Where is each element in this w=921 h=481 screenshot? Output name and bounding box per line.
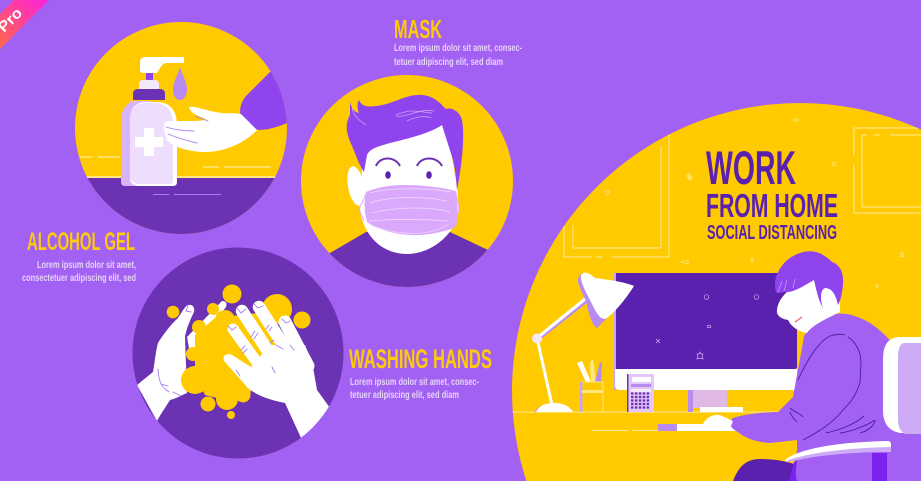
face: [360, 112, 459, 254]
chair arm rest: [785, 441, 891, 462]
hair: [347, 95, 463, 190]
hand on keyboard: [703, 415, 733, 426]
keyboard: [658, 424, 737, 431]
text block: washing hands: tetuer adipiscing elit, sed diam: [350, 390, 459, 401]
heading: work from home: [706, 151, 838, 239]
text block: alcohol gel: Lorem ipsum dolor sit amet,: [37, 260, 136, 271]
panel: mask circle: [300, 75, 520, 300]
icon: drop: [173, 67, 187, 100]
icon: face mask: [359, 185, 459, 235]
panel: washing hands circle: [132, 247, 344, 459]
chair post: [872, 453, 887, 481]
icon: hand receiving gel: [164, 70, 290, 152]
wall frames: [564, 128, 921, 258]
mouth: [795, 317, 802, 322]
eyes and eyebrows: [376, 158, 442, 179]
desk lamp: [532, 273, 634, 412]
person: [703, 251, 921, 481]
panel: alcohol gel circle: [75, 22, 290, 237]
text block: alcohol gel: ALCOHOL GEL: [27, 228, 135, 256]
heading: work from home: SOCIAL DISTANCING: [707, 222, 837, 244]
desk line: [512, 412, 787, 413]
heading: work from home: FROM HOME: [706, 187, 838, 224]
shoulders: [330, 232, 488, 287]
right hand: [224, 304, 330, 440]
text block: alcohol gel: consectetuer adipiscing elit, sed: [22, 273, 136, 284]
panel: work from home circle: [500, 100, 921, 481]
text block: mask: [394, 14, 522, 68]
hair: [775, 251, 843, 308]
text block: washing hands: Lorem ipsum dolor sit amet, consec-: [350, 377, 479, 388]
icon: sanitizer bottle: [121, 57, 184, 186]
ear: [347, 166, 362, 206]
head: [777, 275, 840, 333]
Pro ribbon: [0, 0, 49, 49]
text block: alcohol gel: [22, 228, 136, 284]
heading: work from home: WORK: [706, 141, 796, 194]
text block: washing hands: WASHING HANDS: [349, 344, 492, 374]
legs: [733, 459, 800, 481]
torso and arm: [730, 314, 921, 481]
wall sparkles: [605, 118, 904, 288]
text block: mask: MASK: [394, 14, 442, 44]
soap foam: [167, 284, 310, 419]
text block: washing hands: [349, 344, 492, 401]
text block: mask: tetuer adipiscing elit, sed diam: [394, 57, 503, 68]
calculator: [627, 374, 654, 412]
monitor: [614, 273, 797, 412]
pen cup: [577, 358, 603, 412]
left hand: [137, 301, 226, 421]
chair back: [883, 337, 921, 434]
text block: mask: Lorem ipsum dolor sit amet, consec-: [394, 43, 522, 54]
